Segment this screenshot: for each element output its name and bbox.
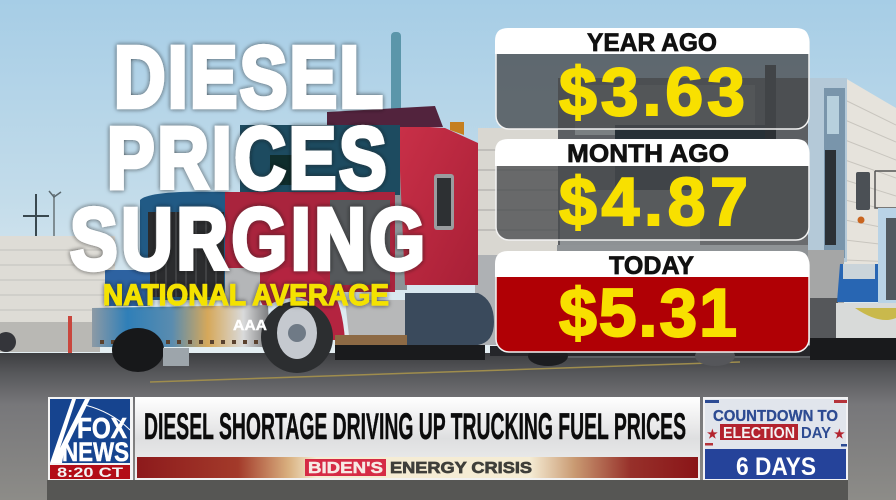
panel: countdown to election day: COUNTDOWN TO: [713, 408, 838, 425]
lower third shadow band: [47, 480, 848, 500]
panel: year ago price: [495, 28, 809, 130]
subheading bar: Biden's energy crisis: [137, 457, 698, 478]
exhaust stack: [391, 32, 401, 146]
panel: countdown to election day: [703, 397, 848, 481]
title: PRICES: [107, 109, 387, 207]
left trailer: [0, 236, 115, 357]
panel: countdown to election day: ★: [834, 427, 845, 441]
panel: month ago price: [495, 139, 809, 240]
days remaining: [705, 449, 846, 481]
panel: countdown to election day: DAY: [801, 425, 831, 442]
wheels: [112, 328, 164, 372]
cab sleeper: [398, 125, 478, 285]
panel: today price: [495, 251, 809, 352]
panel: month ago price: MONTH AGO: [567, 140, 729, 168]
second truck behind panels: [490, 65, 812, 366]
icon: Fox News logo with clock: 8:20 CT: [57, 464, 124, 480]
panel: headline banner: [135, 397, 700, 480]
front fender: [260, 267, 345, 340]
bumper: [92, 305, 270, 347]
title: SURGING: [70, 190, 425, 288]
road: [0, 353, 896, 500]
source: AAA: AAA: [233, 318, 268, 334]
icon: Fox News logo with clock: FOX: [77, 413, 128, 445]
panel: year ago price: $3.63: [559, 54, 745, 130]
red semi truck: [92, 32, 494, 373]
right blue truck: [810, 171, 896, 360]
panel: year ago price: YEAR AGO: [587, 29, 717, 57]
title: DIESEL: [114, 28, 383, 126]
panel: today price: $5.31: [559, 275, 737, 351]
subheading bar: Biden's energy crisis: BIDEN'S: [308, 460, 383, 477]
panel: today price: TODAY: [609, 252, 694, 280]
utility poles: [23, 191, 61, 238]
cab windows: [240, 125, 400, 195]
fuel tank: [405, 293, 494, 345]
hood: [140, 192, 225, 300]
right trailer and column: [808, 78, 896, 345]
white trailer behind red truck: [475, 128, 568, 345]
panel: month ago price: $4.87: [559, 164, 748, 240]
panel: countdown to election day: ★: [707, 427, 718, 441]
title: [70, 28, 425, 288]
panel: countdown to election day: ELECTION: [723, 425, 795, 442]
subtitle: national average: NATIONAL AVERAGE: [103, 279, 389, 312]
icon: Fox News logo with clock: NEWS: [62, 437, 129, 467]
icon: Fox News logo with clock: [48, 397, 133, 480]
subheading bar: Biden's energy crisis: ENERGY CRISIS: [390, 460, 532, 477]
days remaining: 6 DAYS: [736, 453, 816, 481]
